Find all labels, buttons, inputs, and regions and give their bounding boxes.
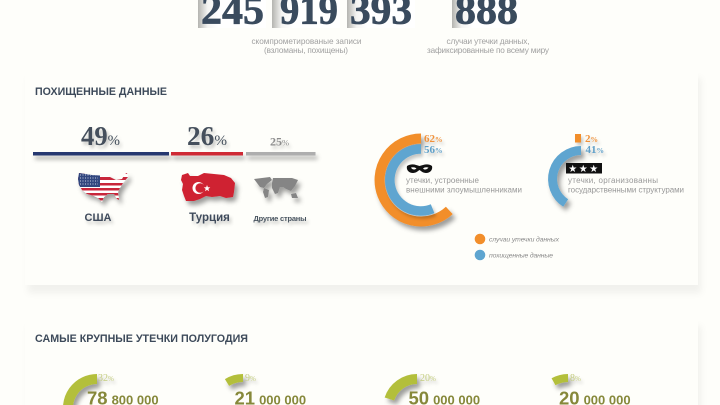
text: state actors: государственными структурами — [568, 186, 684, 194]
leak 3: 50 000 000 — [389, 373, 480, 405]
leak 4: 20 000 000 — [554, 373, 631, 405]
heading: stolen data: ПОХИЩЕННЫЕ ДАННЫЕ — [35, 86, 167, 98]
icon: USA flag map — [76, 171, 130, 204]
leak 1: 78 800 000 — [68, 373, 159, 405]
panel: largest leaks — [25, 318, 698, 405]
label: other countries: Другие страны — [254, 214, 306, 223]
legend — [475, 234, 560, 260]
leak 2: 21 000 000 — [227, 373, 306, 405]
value: 8%: 8% — [570, 373, 581, 384]
arc: incidents 2% — [575, 134, 581, 142]
bar: Turkey — [171, 152, 243, 156]
icon: Turkey flag map — [181, 173, 235, 201]
caption: compromised records: (взломаны, похищены) — [264, 46, 348, 55]
value: 2%: 2% — [585, 133, 598, 145]
bar: other countries — [246, 152, 316, 156]
icon: mask — [407, 164, 432, 173]
bar: USA — [33, 152, 169, 156]
counter: compromised records — [198, 0, 415, 32]
caption: incidents — [427, 37, 550, 55]
legend: incidents: случаи утечки данных — [489, 236, 560, 244]
arc: 8% — [554, 378, 568, 382]
arc: stolen data 56% — [390, 149, 433, 211]
value: 9%: 9% — [245, 373, 256, 384]
value: 41%: 41% — [586, 144, 604, 156]
arc: 32% — [68, 379, 97, 405]
text: external attackers: утечки, устроенные — [406, 176, 480, 185]
legend: stolen data: похищенные данные — [489, 252, 553, 260]
text: state actors — [568, 176, 684, 194]
icon: classified stars: ★★★ — [568, 164, 600, 175]
donut: external attackers — [380, 133, 522, 221]
value: 32%: 32% — [98, 373, 114, 384]
arc: 20% — [389, 379, 417, 399]
arc: incidents 62% — [380, 138, 449, 221]
text: external attackers: внешними злоумышленниками — [406, 186, 522, 194]
donut: state actors — [553, 133, 684, 203]
heading: largest leaks: САМЫЕ КРУПНЫЕ УТЕЧКИ ПОЛУГОДИЯ — [35, 333, 248, 345]
value: USA 49%: 49% — [81, 121, 120, 151]
icon: world map — [254, 177, 298, 198]
label: Turkey: Турция — [189, 212, 230, 224]
value: 62%: 62% — [424, 133, 442, 145]
arc: stolen data 41% — [553, 150, 581, 203]
panel: stolen data — [25, 70, 698, 285]
label: USA: США — [85, 212, 112, 224]
caption: compromised records — [252, 37, 362, 55]
caption: compromised records: скомпрометированые записи — [252, 37, 362, 46]
caption: incidents: случаи утечки данных, — [446, 37, 530, 46]
value: 20%: 20% — [420, 373, 436, 384]
value: Turkey 26%: 26% — [187, 121, 227, 151]
caption: incidents: зафиксированные по всему миру — [427, 46, 550, 55]
arc: 9% — [227, 378, 243, 382]
text: state actors: утечки, организованны — [568, 176, 658, 185]
text: external attackers — [406, 176, 522, 194]
value: 56%: 56% — [424, 144, 442, 156]
country share bars — [33, 152, 316, 156]
value: other 25%: 25% — [270, 134, 289, 148]
